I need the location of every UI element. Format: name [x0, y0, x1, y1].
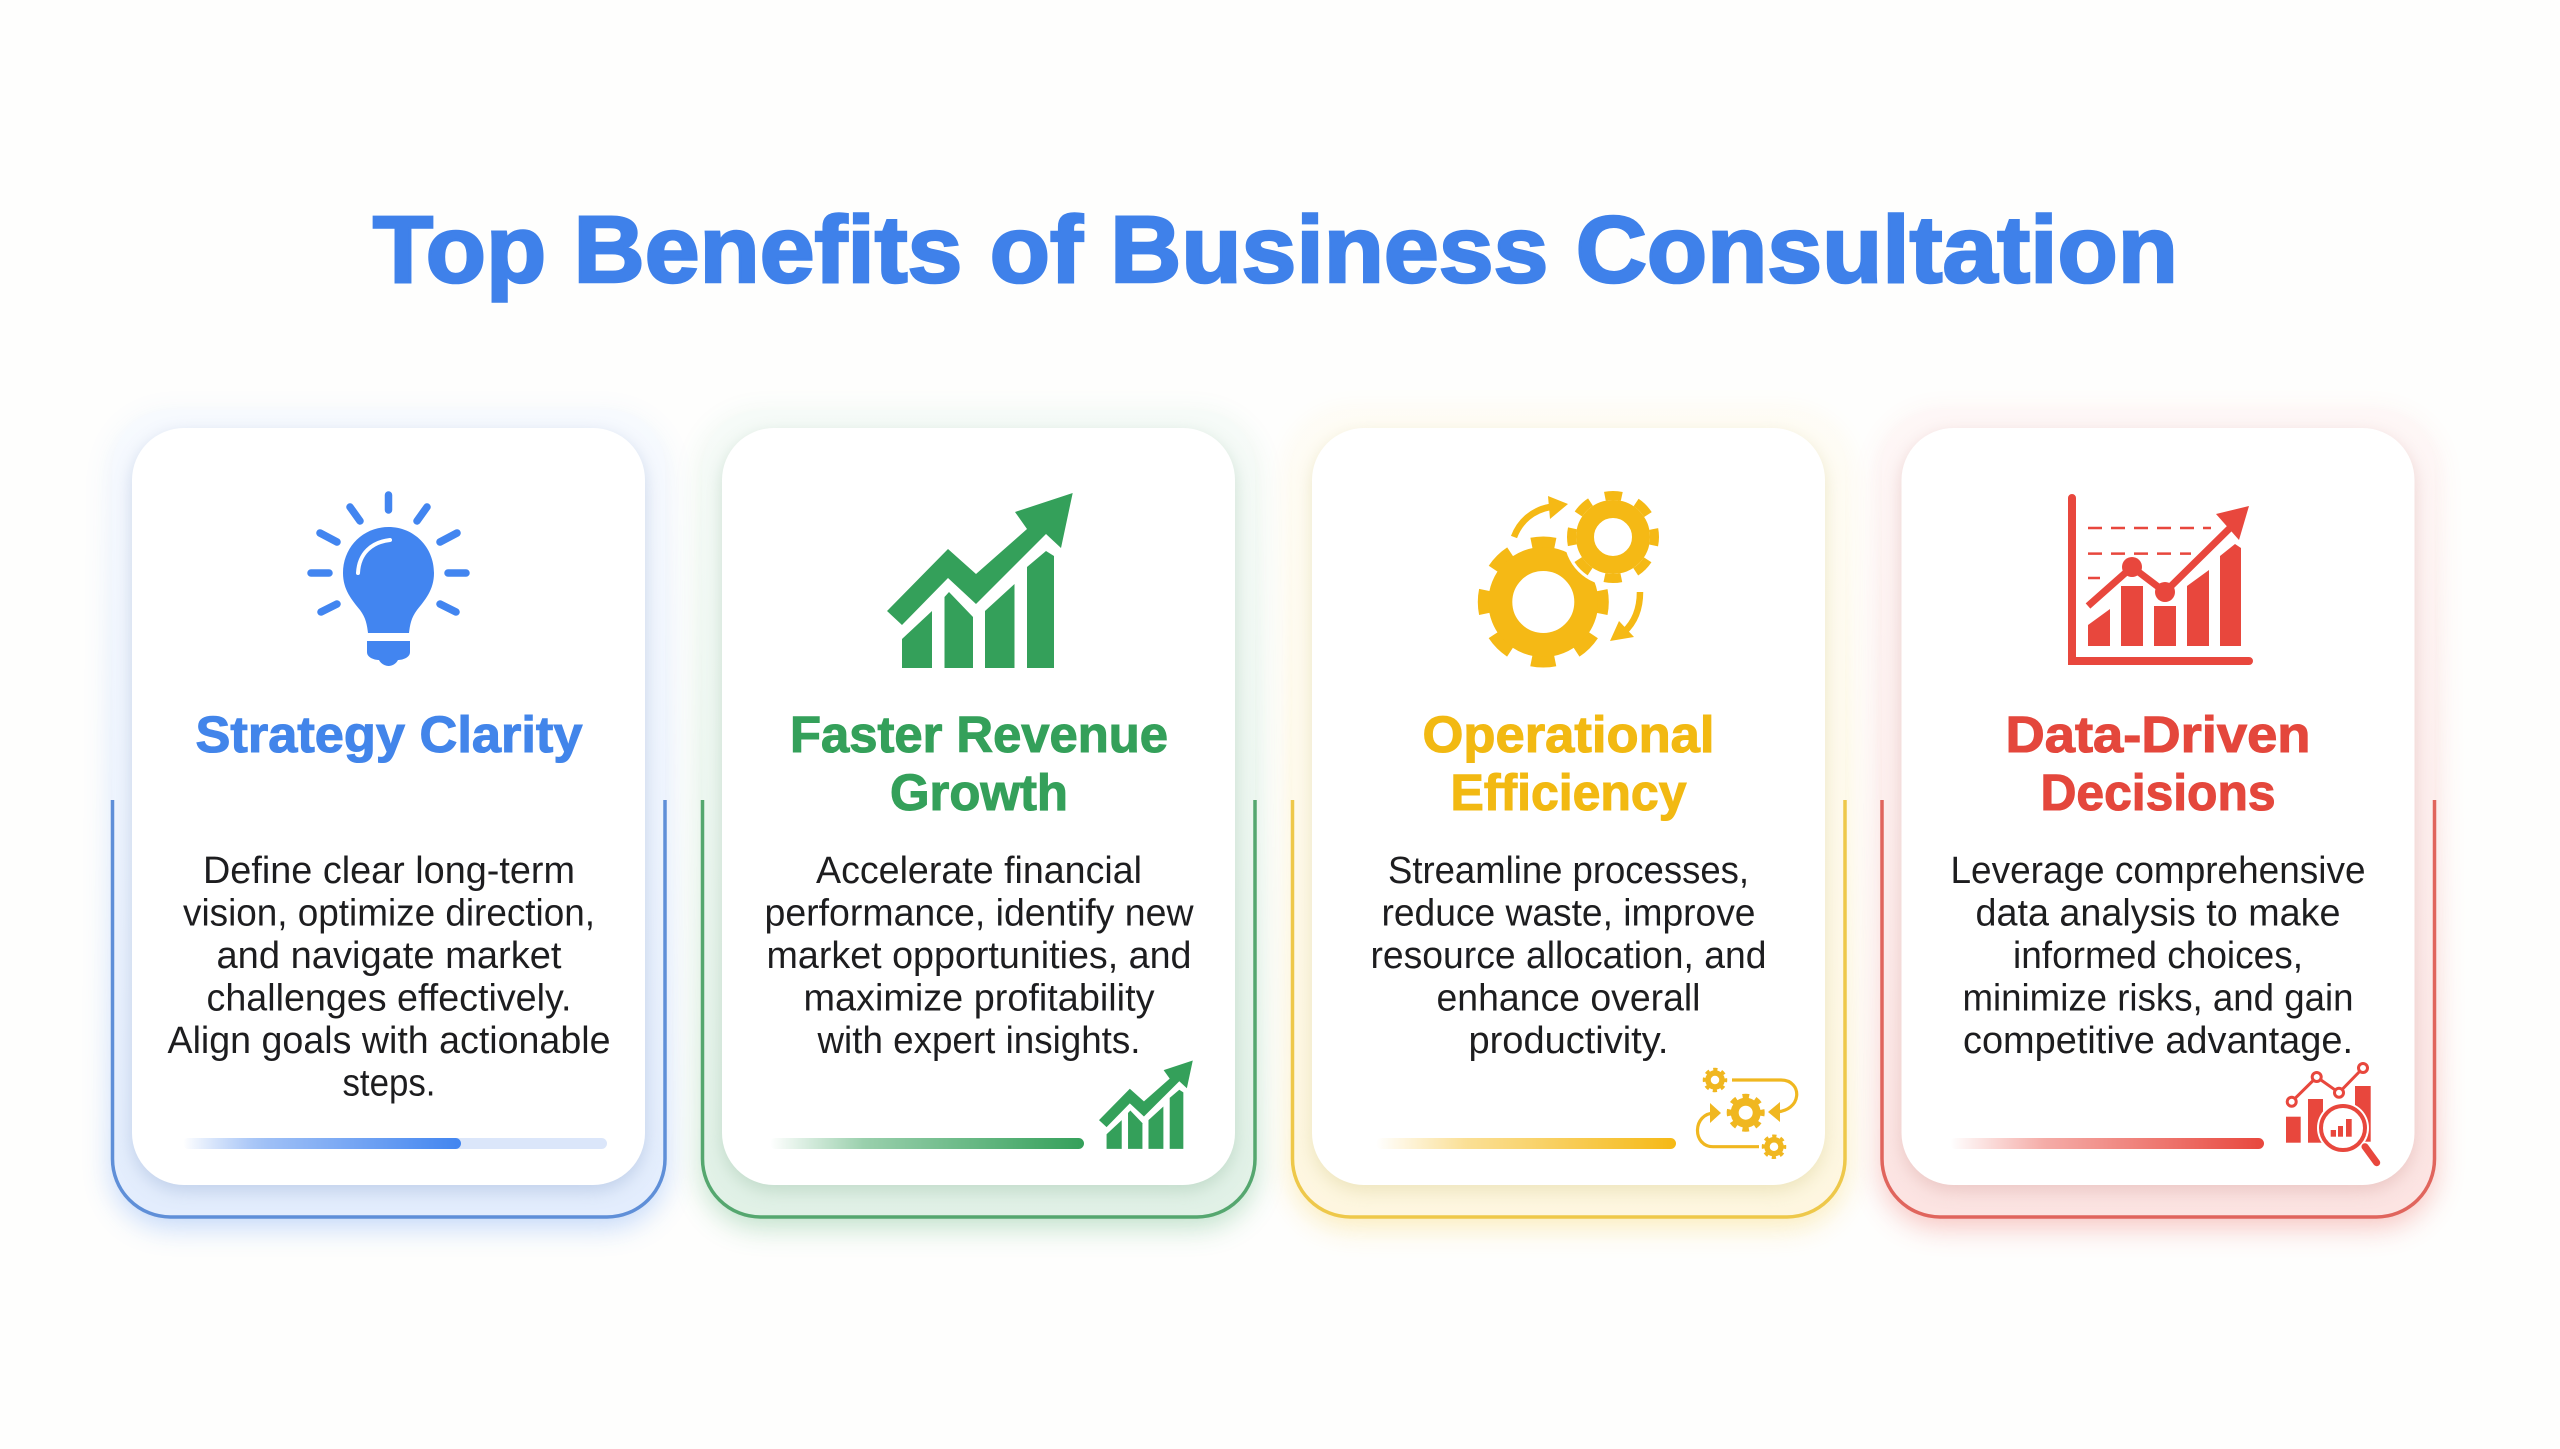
body text: strategy clarity: Define clear long-term	[203, 850, 575, 892]
heading: operational efficiency: Operational	[1422, 706, 1714, 763]
heading: operational efficiency: Efficiency	[1450, 764, 1687, 821]
panel: operational efficiency	[1292, 410, 1845, 1226]
body text: data-driven decisions: Leverage comprehensive	[1950, 850, 2366, 892]
body text: strategy clarity: challenges effectively.	[206, 978, 572, 1020]
body text: strategy clarity	[168, 850, 610, 1104]
panel: strategy clarity	[112, 410, 665, 1226]
icon: process gears	[1697, 1070, 1797, 1157]
icon: small growth chart	[1099, 1060, 1193, 1149]
panel: faster revenue growth	[702, 410, 1255, 1226]
progress bar: yellow	[1376, 1138, 1676, 1149]
card frame: yellow	[1292, 410, 1845, 1226]
heading: operational efficiency	[1422, 706, 1714, 821]
body text: operational efficiency: Streamline processes,	[1388, 850, 1749, 892]
card frame: blue	[112, 410, 665, 1226]
body text: operational efficiency: enhance overall	[1436, 978, 1700, 1020]
title: Top Benefits of Business Consultation	[373, 197, 2178, 303]
body text: faster revenue growth: maximize profitability	[804, 978, 1154, 1020]
body text: strategy clarity: steps.	[342, 1062, 436, 1104]
icon: data chart	[2072, 498, 2249, 661]
body text: data-driven decisions: informed choices,	[2013, 935, 2303, 977]
body text: faster revenue growth: market opportunities, and	[766, 935, 1192, 977]
body text: operational efficiency: resource allocation, and	[1370, 935, 1766, 977]
heading: data-driven decisions	[2006, 706, 2310, 821]
body text: data-driven decisions: data analysis to make	[1976, 892, 2340, 934]
heading: faster revenue growth: Faster Revenue	[790, 706, 1168, 763]
panel: data-driven decisions	[1882, 410, 2434, 1226]
body text: operational efficiency: reduce waste, improve	[1382, 892, 1756, 934]
body text: faster revenue growth	[764, 850, 1194, 1062]
heading: strategy clarity: Strategy Clarity	[196, 706, 583, 763]
progress bar: green	[770, 1138, 1084, 1149]
body text: operational efficiency: productivity.	[1468, 1020, 1668, 1062]
body text: faster revenue growth: with expert insights.	[817, 1020, 1140, 1062]
card frame: green	[702, 410, 1255, 1226]
heading: faster revenue growth	[790, 706, 1168, 821]
body text: strategy clarity: Align goals with actionable	[168, 1020, 610, 1062]
progress bar: blue	[183, 1138, 607, 1149]
body text: data-driven decisions	[1950, 850, 2366, 1062]
icon: growth chart	[887, 493, 1073, 668]
body text: strategy clarity: vision, optimize direction,	[183, 892, 595, 934]
body text: faster revenue growth: performance, identify new	[764, 892, 1194, 934]
body text: data-driven decisions: competitive advantage.	[1963, 1020, 2353, 1062]
body text: strategy clarity: and navigate market	[216, 935, 562, 977]
icon: light bulb	[311, 495, 466, 666]
body text: data-driven decisions: minimize risks, and gain	[1962, 978, 2354, 1020]
icon: gears	[1483, 488, 1662, 662]
body text: faster revenue growth: Accelerate financial	[816, 850, 1142, 892]
card frame: red	[1882, 410, 2434, 1226]
heading: data-driven decisions: Decisions	[2040, 764, 2276, 821]
heading: faster revenue growth: Growth	[890, 764, 1068, 821]
body text: operational efficiency	[1370, 850, 1766, 1062]
heading: data-driven decisions: Data-Driven	[2006, 706, 2310, 763]
icon: small data analysis	[2286, 1064, 2377, 1163]
progress bar: red	[1950, 1138, 2264, 1149]
